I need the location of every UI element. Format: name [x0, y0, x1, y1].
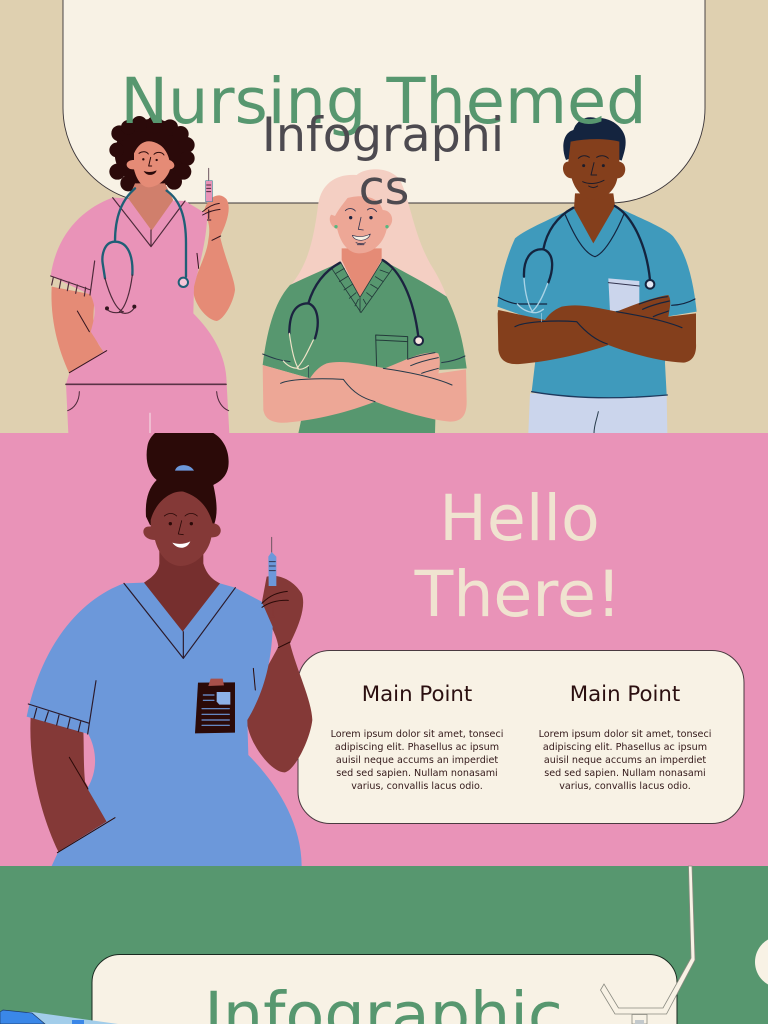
text block: main point one: Lorem ipsum dolor sit amet, tonseci [331, 729, 503, 740]
syringe [206, 168, 212, 220]
text block: main point two: auisil neque accums an imperdiet [544, 755, 706, 766]
arm and sleeve lines [498, 297, 695, 344]
heading: hello there: Hello [439, 481, 600, 555]
panel: title card [63, 0, 705, 203]
title [120, 65, 647, 216]
syringe [267, 537, 276, 617]
scrubs [27, 583, 302, 866]
stethoscope [524, 206, 650, 283]
hair [109, 116, 195, 191]
subtitle: Infographi [262, 108, 504, 163]
heading: hello there: There! [414, 557, 621, 631]
pocket [608, 278, 639, 312]
scrubs [263, 260, 467, 433]
panel: top beige section [0, 0, 768, 433]
text block: main point one: Main Point [362, 682, 472, 707]
scrubs [51, 198, 229, 433]
neck [144, 550, 220, 632]
stethoscope [102, 188, 186, 278]
text block: main point two: sed sed sapien. Nullam nonasami [544, 768, 706, 779]
illustration: blue figure corner [0, 1010, 118, 1024]
inner neck [342, 248, 382, 298]
scrubs [497, 206, 697, 398]
text block: main point one: adipiscing elit. Phasellus ac ipsum [335, 742, 499, 753]
text block: main point one: auisil neque accums an imperdiet [336, 755, 498, 766]
text block: main point one: sed sed sapien. Nullam nonasami [336, 768, 498, 779]
arm right skin [193, 195, 235, 321]
illustration: nurse in teal scrubs [497, 117, 697, 433]
arm left skin [51, 287, 104, 373]
arm right [247, 576, 312, 772]
pants [528, 393, 667, 433]
pocket [376, 335, 408, 368]
text block: main point two: varius, convallis lacus odio. [559, 781, 691, 792]
panel: bottom title card [92, 954, 677, 1024]
scrub details [124, 583, 235, 658]
crossed arms [263, 353, 467, 423]
hair [290, 169, 447, 307]
badge [195, 682, 235, 733]
face [127, 141, 174, 187]
hair [563, 117, 626, 161]
hair tie [175, 465, 194, 471]
text block: main point one [331, 682, 503, 792]
text block: main point one: varius, convallis lacus odio. [351, 781, 483, 792]
text block: main point two: Lorem ipsum dolor sit amet, tonseci [539, 729, 711, 740]
illustration: iv drip stand [600, 866, 695, 1024]
illustration: nurse in pink scrubs [51, 116, 235, 433]
illustration: nurse in green scrubs [263, 169, 467, 433]
text block: main point two [539, 682, 711, 792]
face [563, 139, 625, 199]
neck [128, 183, 173, 231]
panel: green infographic section [0, 866, 768, 1024]
collar [332, 261, 393, 313]
stethoscope [289, 260, 418, 338]
subtitle: cs [359, 161, 409, 216]
arm left [30, 717, 107, 852]
text block: main point two: adipiscing elit. Phasellus ac ipsum [543, 742, 707, 753]
arm and sleeve lines [263, 353, 465, 402]
face [143, 492, 221, 566]
neck [574, 193, 615, 243]
panel: main points card [298, 650, 744, 824]
hair bun [146, 433, 229, 525]
face [330, 196, 392, 253]
text block: main point two: Main Point [570, 682, 680, 707]
panel: pink hello section [0, 433, 768, 866]
scrub details [113, 198, 185, 247]
title: Nursing Themed [120, 65, 647, 139]
illustration: nurse in blue scrubs [27, 433, 312, 866]
crossed arms [498, 295, 696, 364]
decorative circle at right edge [755, 936, 768, 988]
